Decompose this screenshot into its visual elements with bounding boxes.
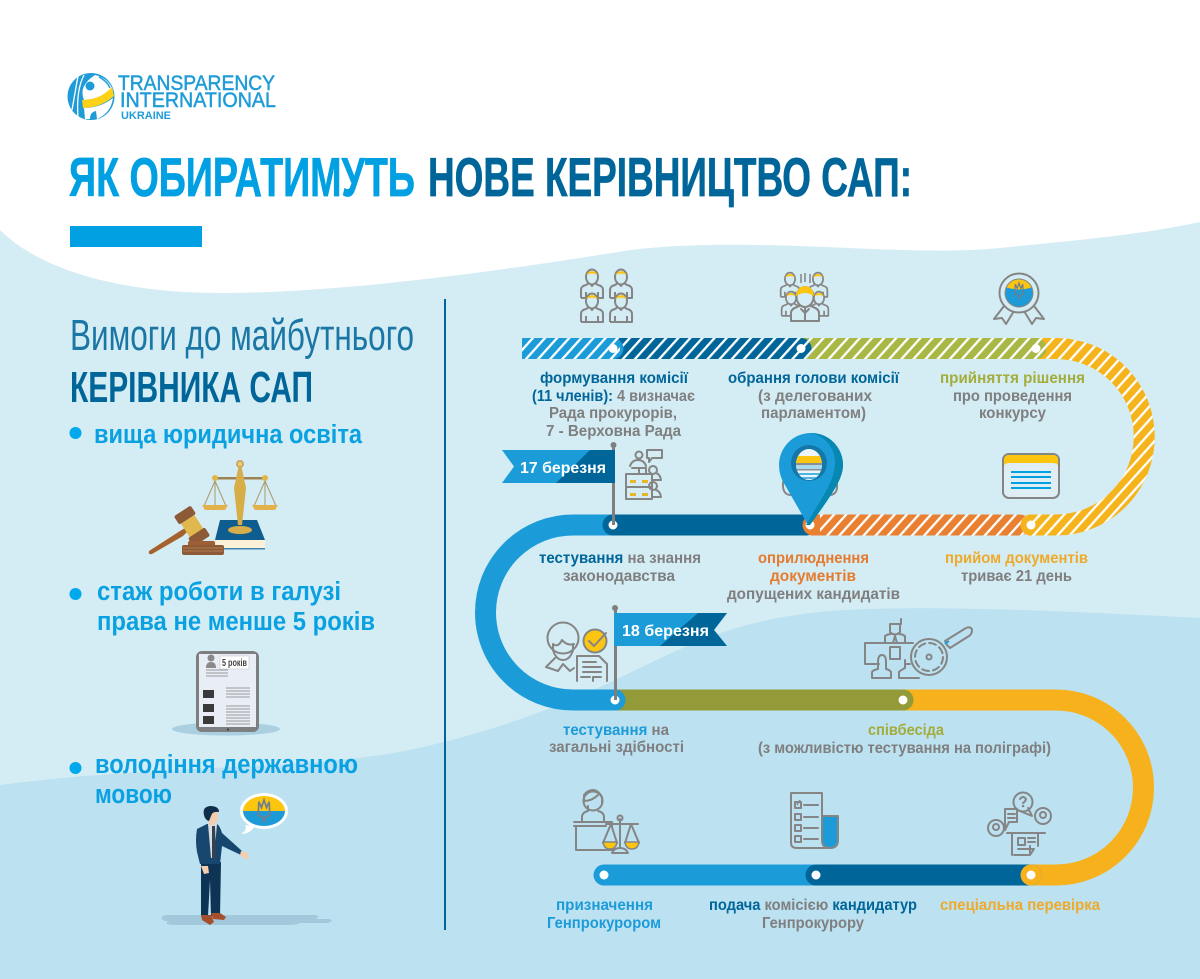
requirement: legal education: вища юридична освіта: [94, 421, 363, 449]
label: interview: (з можливістю тестування на поліграфі): [758, 740, 1051, 757]
requirement: work experience: стаж роботи в галузі: [97, 578, 341, 606]
segment: dark blue solid: [613, 514, 806, 536]
icon: scales, gavel and book: [149, 461, 278, 555]
icon: tablet with CV: 5 років: [222, 658, 247, 669]
label: commission formation: (11 членів): 4 визначає: [532, 388, 695, 405]
icon: candidate with check mark: [546, 622, 607, 681]
segment: dark blue striped: [613, 338, 801, 359]
segment: orange striped: [813, 514, 1020, 536]
logo: Transparency International Ukraine: TRANSPARENCY: [118, 71, 275, 95]
label: document submission: триває 21 день: [961, 568, 1072, 585]
title: НОВЕ КЕРІВНИЦТВО САП:: [428, 147, 912, 208]
vertical divider: [444, 299, 446, 930]
label: commission head election: (з делегованих: [758, 388, 872, 405]
label: general ability test: [549, 722, 684, 756]
label: candidates submission: [709, 897, 917, 932]
timeline track: [486, 338, 1144, 886]
label: special check: спеціальна перевірка: [940, 897, 1100, 914]
label: competition decision: конкурсу: [979, 405, 1046, 422]
title: ЯК ОБИРАТИМУТЬ: [69, 147, 415, 208]
icon: medal with trident: [994, 274, 1044, 324]
label: commission head election: обрання голови комісії: [728, 370, 899, 387]
segment: light blue cap over olive: [604, 690, 626, 710]
requirement: state language: [70, 751, 358, 809]
segment: olive solid: [616, 690, 903, 710]
label: appointment: призначення: [556, 897, 653, 914]
panel: requirements: [70, 311, 414, 925]
segment: yellow curve lower: [903, 700, 1144, 875]
requirement: state language: володіння державною: [95, 751, 358, 779]
icon: prosecutor general at desk with scales: [574, 790, 639, 853]
segment: light blue striped: [522, 338, 624, 359]
label: law test: [539, 550, 701, 585]
label: competition decision: [940, 370, 1085, 422]
label: commission formation: формування комісії: [540, 370, 688, 387]
label: commission head election: парламентом): [761, 405, 866, 422]
icon: location pin: [779, 433, 843, 525]
label: interview: співбесіда: [868, 722, 944, 739]
label: commission formation: [532, 370, 695, 440]
icon: four commission members: [581, 270, 632, 322]
flag: 17 березня: [502, 442, 616, 525]
title: [69, 147, 912, 208]
flag: 18 березня: 18 березня: [622, 623, 709, 640]
segment: yellow cap at documents: [1020, 514, 1042, 536]
requirement: state language: мовою: [95, 781, 172, 809]
requirements heading: Вимоги до майбутнього: [70, 311, 414, 360]
background: darker blue wave: [0, 608, 1200, 979]
segment: bottom dark blue: [816, 864, 1031, 886]
segment: orange cap at pin: [802, 514, 820, 536]
logo: Transparency International Ukraine: UKRAINE: [121, 110, 171, 122]
label: competition decision: про проведення: [953, 388, 1072, 405]
label: publication of documents: [727, 550, 900, 603]
label: general ability test: загальні здібності: [549, 739, 684, 756]
segment: green striped: [801, 338, 1036, 359]
label: general ability test: тестування на: [563, 722, 669, 739]
segment: light blue arc: [486, 525, 640, 700]
segment: bottom yellow cap: [1020, 864, 1042, 886]
label: appointment: Генпрокурором: [547, 915, 661, 932]
label: publication of documents: оприлюднення: [758, 550, 869, 567]
logo: Transparency International Ukraine: [68, 71, 276, 122]
label: publication of documents: допущених кандидатів: [727, 586, 900, 603]
label: commission formation: Рада прокурорів,: [549, 405, 677, 422]
label: document submission: [945, 550, 1088, 585]
logo: Transparency International Ukraine: INTERNATIONAL: [120, 88, 276, 112]
label: candidates submission: подача комісією кандидатур: [709, 897, 917, 914]
background: light blue wave: [0, 222, 1200, 979]
label: document submission: прийом документів: [945, 550, 1088, 567]
segment: bottom light blue: [604, 864, 816, 886]
label: law test: тестування на знання: [539, 550, 701, 567]
label: law test: законодавства: [563, 568, 675, 585]
requirement: work experience: [70, 578, 375, 636]
label: appointment: [547, 897, 661, 932]
flag: 18 березня: [612, 605, 727, 700]
label: interview: [758, 722, 1051, 757]
flag: 17 березня: 17 березня: [520, 460, 606, 477]
icon: special check dossier: [988, 792, 1051, 855]
timeline nodes: [600, 344, 1040, 880]
requirements heading: [70, 311, 414, 412]
requirement: work experience: права не менше 5 років: [97, 608, 375, 636]
icon: man in suit with speech bubble: [162, 793, 332, 925]
label: commission head election: [728, 370, 899, 422]
icon: tablet with CV: [172, 651, 280, 736]
requirements heading: КЕРІВНИКА САП: [70, 363, 313, 412]
icon: org chart with people: [626, 450, 662, 499]
label: candidates submission: Генпрокурору: [762, 915, 864, 932]
icon: interview with magnifier: [865, 619, 972, 678]
label: publication of documents: документів: [770, 568, 856, 585]
icon: commission head with members: [781, 273, 828, 321]
label: competition decision: прийняття рішення: [940, 370, 1085, 387]
icon: application form card: [1003, 454, 1059, 498]
segment: yellow striped arc: [1031, 348, 1144, 525]
label: commission formation: 7 - Верховна Рада: [546, 423, 681, 440]
title accent bar: [70, 226, 202, 247]
icon: checklist with blue roll: [791, 793, 838, 848]
